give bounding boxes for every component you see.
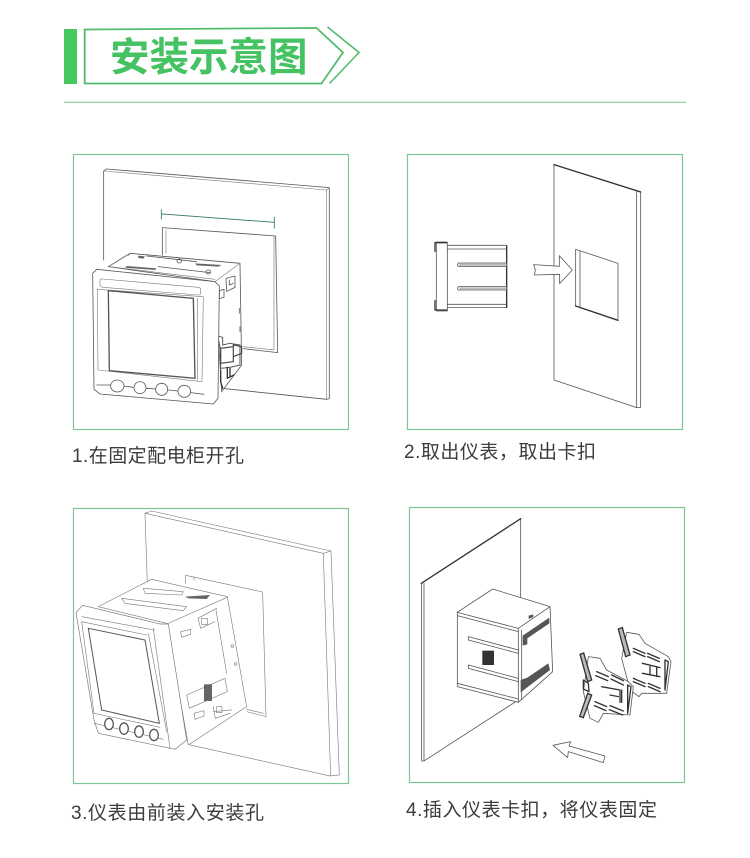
- meter front: [93, 269, 219, 404]
- cut-out: [576, 249, 618, 320]
- meter side details: [219, 276, 240, 332]
- illustration: rear view with clips: [421, 519, 671, 763]
- title: 安装示意图: [110, 36, 308, 80]
- buttons: [97, 385, 204, 394]
- arrow: [534, 256, 572, 284]
- arrow: [553, 742, 605, 763]
- caption 3: 3.仪表由前装入安装孔: [71, 802, 264, 824]
- title chevron: [328, 27, 359, 84]
- screen: [88, 628, 159, 723]
- clip front: [580, 653, 633, 722]
- meter body: [108, 253, 242, 392]
- meter front: [76, 605, 187, 749]
- title arrow outline: [85, 28, 343, 84]
- header divider: [64, 101, 686, 103]
- dimension line: [161, 209, 274, 229]
- green accent bar: [64, 29, 77, 84]
- panel 2: take out meter and clips: [408, 154, 682, 430]
- plate: [145, 511, 339, 776]
- meter body: [98, 579, 247, 745]
- meter side: [436, 242, 447, 311]
- plate: [422, 519, 521, 761]
- caption 1: 1.在固定配电柜开孔: [72, 445, 244, 467]
- hole: [186, 575, 266, 717]
- illustration: panel with meter front view: [93, 169, 329, 404]
- meter back: [457, 589, 553, 702]
- panel 4: insert clips to fix meter: [410, 508, 684, 782]
- plate: [554, 165, 641, 408]
- cabinet plate: [104, 169, 329, 399]
- illustration: meter inserted in plate: [76, 511, 339, 776]
- caption 4: 4.插入仪表卡扣，将仪表固定: [406, 799, 657, 821]
- caption 2: 2.取出仪表，取出卡扣: [404, 441, 596, 463]
- hole: [162, 228, 278, 353]
- clip rear: [618, 628, 671, 697]
- screen: [97, 289, 203, 382]
- header banner: [64, 27, 359, 84]
- illustration: meter side view and plate: [435, 165, 641, 408]
- buttons: [94, 723, 163, 739]
- panel 3: insert meter from the front: [74, 508, 348, 784]
- panel 1: cut hole in cabinet: [74, 154, 348, 430]
